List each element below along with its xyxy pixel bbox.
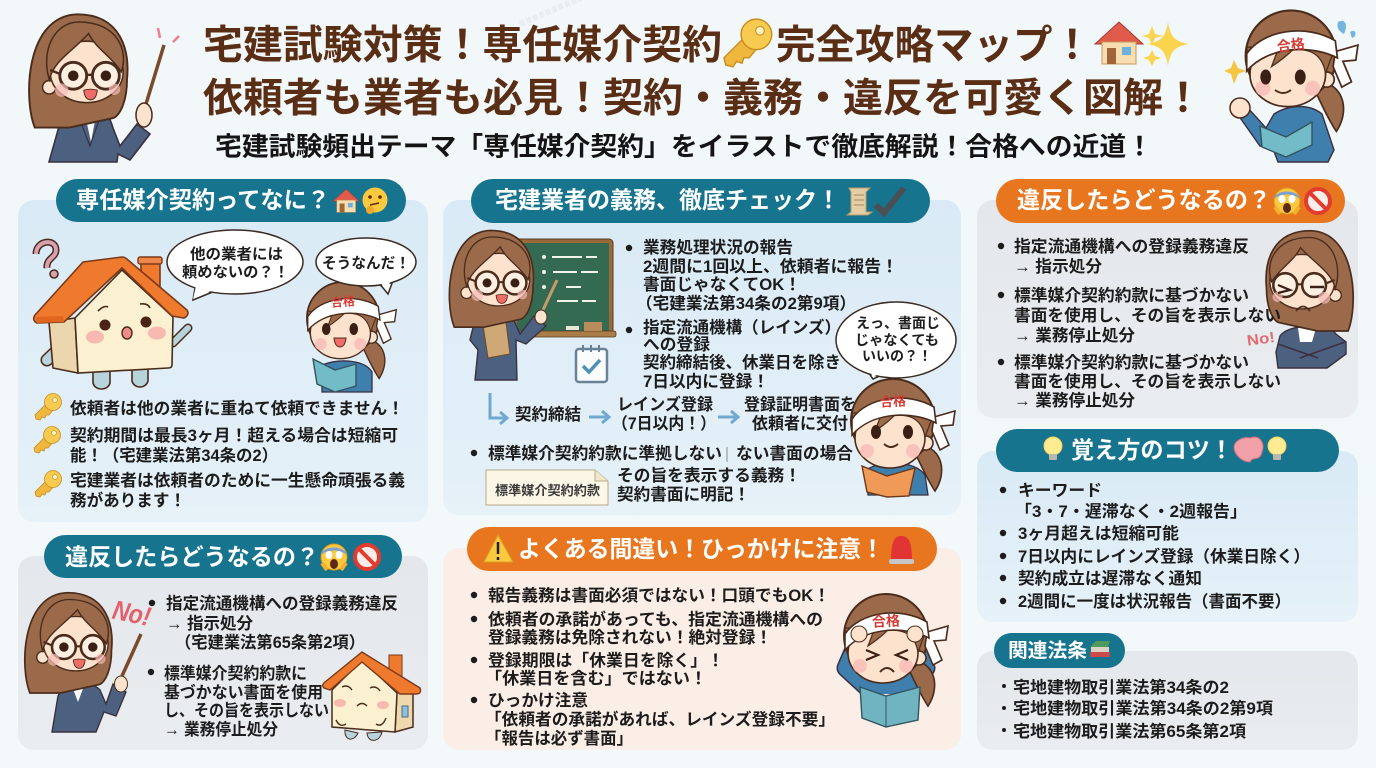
chalkboard	[513, 239, 616, 337]
heading pill	[994, 633, 1125, 668]
panel: what is exclusive brokerage	[18, 179, 428, 522]
law list: 宅地建物取引業法第34条の2	[1013, 677, 1229, 697]
speech bubble: other agents	[167, 230, 303, 300]
character: student in distress: 合格	[872, 612, 900, 630]
speech bubble: I see: そうなんだ！	[322, 255, 410, 272]
point 1	[35, 394, 404, 420]
character: teacher at board	[449, 230, 557, 380]
tip list	[1000, 482, 1310, 611]
character: worried teacher, arms crossed	[1246, 231, 1353, 368]
flow diagram: レインズ登録	[617, 394, 713, 414]
tip list: 2週間に一度は状況報告（書面不要）	[1018, 591, 1291, 611]
consequence 2	[148, 663, 329, 739]
icon: calendar check	[576, 345, 607, 382]
panel background	[18, 556, 428, 750]
arrow: start	[490, 393, 507, 424]
duty list: standard contract	[471, 443, 854, 504]
duty list: reporting: 業務処理状況の報告	[643, 238, 793, 257]
tip list: 契約成立は遅滞なく通知	[1018, 568, 1202, 588]
mistake list: 報告義務は書面必須ではない！口頭でもOK！	[488, 585, 830, 605]
icon: title house	[1095, 22, 1143, 64]
heading pill: 覚え方のコツ！	[1071, 437, 1233, 463]
arrow: to certificate	[718, 411, 738, 423]
consequence 3: 標準媒介契約約款に基づかない	[1014, 352, 1249, 372]
panel: agent duties	[443, 179, 961, 515]
panel: related law	[977, 633, 1358, 750]
point 2	[34, 426, 398, 465]
mistake list: 「報告は必ず書面」	[485, 728, 633, 748]
duty list: standard contract: 契約書面に明記！	[617, 484, 750, 504]
icon: title key	[724, 19, 772, 67]
point 3: 務があります！	[70, 490, 186, 510]
duty list: standard contract: その旨を表示する義務！	[617, 466, 801, 485]
tip list: 7日以内にレインズ登録（休業日除く）	[1018, 546, 1310, 566]
point 3: 宅建業者は依頼者のために一生懸命頑張る義	[70, 471, 406, 490]
icon: bulb right	[1268, 437, 1286, 460]
panel: consequences left	[18, 535, 428, 750]
flow diagram: （7日以内！）	[612, 414, 716, 433]
consequence 2: → 業務停止処分	[164, 720, 278, 739]
icon: books	[1090, 641, 1110, 657]
title line 1	[203, 19, 1189, 68]
speech bubble: not in writing?	[836, 302, 956, 379]
duty list: registration: 指定流通機構（レインズ）	[643, 317, 841, 337]
law list: 宅地建物取引業法第34条の2第9項	[1013, 698, 1274, 718]
character: student in distress	[844, 594, 948, 727]
heading pill	[996, 179, 1345, 223]
heading pill	[56, 179, 406, 222]
character: student with orange book	[851, 379, 955, 497]
mistake list	[471, 585, 835, 748]
duty list: registration	[626, 317, 841, 391]
speech bubble: other agents: 他の業者には	[190, 245, 283, 263]
character: worried house	[34, 257, 188, 389]
point 1: 依頼者は他の業者に重ねて依頼できません！	[70, 399, 404, 418]
tip list: 「3・7・遅滞なく・2週報告」	[1015, 502, 1247, 521]
character: student with book, top right	[1224, 10, 1358, 162]
icon: question mark	[36, 242, 58, 278]
panel: memory tips	[977, 429, 1358, 622]
mistake list: 「休業日を含む」ではない！	[485, 669, 707, 688]
panel background	[977, 200, 1358, 418]
duty list: standard contract: ない書面の場合	[736, 443, 854, 463]
consequence 3: → 業務停止処分	[1014, 391, 1135, 410]
subtitle: 宅建試験頻出テーマ「専任媒介契約」をイラストで徹底解説！合格への近道！	[215, 132, 1153, 162]
flow diagram	[490, 393, 856, 433]
speech bubble: not in writing?: じゃなくても	[855, 332, 939, 348]
law list	[1002, 677, 1274, 741]
consequence 1: → 指示処分	[1014, 257, 1102, 276]
icon: siren	[889, 536, 914, 564]
icon: thinking face	[362, 188, 388, 214]
tip list: キーワード	[1018, 482, 1102, 500]
title	[203, 19, 1203, 121]
icon: check mark	[876, 188, 904, 213]
consequence 1: 指定流通機構への登録義務違反	[166, 593, 398, 613]
flow diagram: 契約締結	[515, 405, 581, 424]
point 2: 契約期間は最長3ヶ月！超える場合は短縮可	[70, 426, 398, 445]
consequence 3: 書面を使用し、その旨を表示しない	[1014, 371, 1281, 391]
speech bubble: not in writing?: えっ、書面じ	[856, 315, 940, 331]
icon: prohibited	[355, 545, 379, 569]
duty list: reporting: （宅建業法第34条の2第9項）	[636, 293, 856, 313]
character: student reading	[307, 282, 396, 392]
panel background	[443, 548, 961, 750]
icon: house emoji	[333, 189, 359, 212]
character: student with book, top right: 合格	[1276, 35, 1306, 55]
icon: brain	[1234, 437, 1263, 462]
consequence 1: 指定流通機構への登録義務違反	[1014, 236, 1249, 256]
mistake list: 登録義務は免除されない！絶対登録！	[488, 628, 772, 647]
law list: 宅地建物取引業法第65条第2項	[1013, 721, 1247, 741]
duty list: reporting	[626, 238, 898, 313]
heading pill	[467, 527, 937, 571]
character: teacher saying no: No!	[110, 595, 153, 632]
mistake list: 「依頼者の承諾があれば、レインズ登録不要」	[485, 709, 835, 729]
consequence 2: 標準媒介契約約款に	[164, 663, 307, 683]
duty list: reporting: 2週間に1回以上、依頼者に報告！	[643, 257, 898, 276]
character: student reading: 合格	[330, 293, 355, 310]
consequence 2	[998, 285, 1281, 345]
arrow: to registration	[589, 411, 609, 423]
title line 2: 依頼者も業者も必見！契約・義務・違反を可愛く図解！	[203, 76, 1203, 120]
heading pill	[471, 179, 930, 223]
icon: warning	[484, 535, 513, 562]
point 3	[35, 470, 406, 510]
document: standard contract	[486, 470, 608, 505]
character: worried teacher, arms crossed: No!	[1246, 329, 1276, 350]
character: teacher saying no	[25, 593, 153, 732]
flow diagram: 依頼者に交付	[752, 414, 848, 433]
mistake list: ひっかけ注意	[488, 691, 589, 710]
duty list: reporting: 書面じゃなくてOK！	[643, 274, 801, 294]
duty list: registration: への登録	[643, 335, 711, 354]
panel: consequences right	[977, 179, 1358, 418]
panel background	[18, 200, 428, 522]
icon: bulb left	[1044, 437, 1062, 460]
consequence 3	[998, 352, 1281, 410]
icon: screaming face	[1274, 188, 1300, 214]
consequence 2: 書面を使用し、その旨を表示しない	[1014, 305, 1281, 325]
tip list: 3ヶ月超えは短縮可能	[1018, 523, 1179, 543]
icon: scroll	[847, 188, 872, 215]
consequence 1	[998, 236, 1249, 276]
heading pill: 専任媒介契約ってなに？	[76, 187, 330, 213]
consequence 1: （宅建業法第65条第2項）	[175, 632, 365, 652]
speech bubble: other agents: 頼めないの？！	[182, 263, 289, 281]
speech bubble: I see	[316, 238, 416, 294]
panel background	[443, 200, 961, 515]
heading pill: よくある間違い！ひっかけに注意！	[518, 536, 884, 562]
mistake list: 依頼者の承諾があっても、指定流通機構への	[488, 609, 823, 629]
title line 1: 完全攻略マップ！	[776, 24, 1092, 68]
point 2: 能！（宅建業法第34条の2）	[70, 445, 278, 465]
panel background	[977, 451, 1358, 622]
heading pill: 違反したらどうなるの？	[65, 544, 319, 570]
heading pill	[44, 535, 402, 578]
duty list: standard contract: 標準媒介契約約款に準拠しない	[488, 443, 722, 463]
icon: prohibited	[1306, 189, 1330, 213]
icon: sparkles	[1142, 22, 1189, 66]
heading pill	[996, 429, 1339, 472]
mistake list: 登録期限は「休業日を除く」！	[488, 651, 724, 670]
character: teacher with pointer, top left	[29, 14, 179, 162]
title line 1: 宅建試験対策！専任媒介契約	[203, 24, 722, 68]
speech bubble: not in writing?: いいの？！	[862, 348, 932, 364]
document: standard contract: 標準媒介契約約款	[495, 483, 600, 498]
consequence 2: し、その旨を表示しない	[164, 701, 329, 720]
flow diagram: 登録証明書面を	[744, 394, 856, 414]
heading pill: 宅建業者の義務、徹底チェック！	[495, 187, 840, 213]
heading pill: 違反したらどうなるの？	[1017, 187, 1271, 213]
heading pill: 関連法条	[1008, 640, 1087, 662]
panel: common mistakes	[443, 527, 961, 750]
consequence 1: → 指示処分	[166, 614, 253, 633]
consequence 1	[149, 593, 398, 652]
consequence 2: 基づかない書面を使用	[164, 682, 323, 702]
character: crying house	[323, 652, 420, 740]
consequence 2: → 業務停止処分	[1014, 326, 1135, 345]
consequence 2: 標準媒介契約約款に基づかない	[1014, 285, 1249, 305]
character: student with orange book: 合格	[880, 393, 906, 410]
duty list: registration: 契約締結後、休業日を除き	[643, 352, 841, 372]
panel background	[977, 651, 1358, 750]
icon: screaming face	[321, 544, 347, 570]
duty list: registration: 7日以内に登録！	[643, 372, 769, 391]
